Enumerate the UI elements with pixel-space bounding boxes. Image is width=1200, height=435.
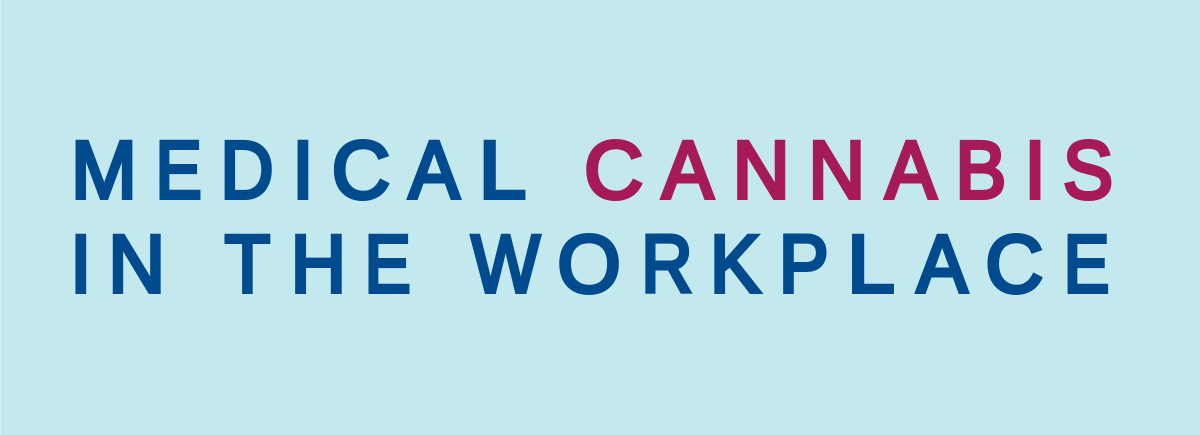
- title line 1: medical: I: [293, 124, 313, 216]
- title line 2: L: [847, 218, 895, 310]
- title line 1: medical: D: [220, 126, 273, 216]
- title line 1: cannabis: N: [808, 125, 865, 215]
- title line 2: K: [710, 218, 760, 310]
- title line 2: P: [779, 218, 829, 310]
- title line 1: medical: A: [409, 125, 460, 216]
- title line 2: A: [917, 219, 968, 310]
- title line 1: cannabis: B: [955, 125, 1006, 216]
- title line 1: medical: C: [332, 126, 390, 216]
- title line 2: O: [557, 219, 621, 310]
- title line 1: cannabis: A: [662, 124, 713, 215]
- title line 2: E: [365, 219, 411, 310]
- title line 2: T: [225, 218, 270, 310]
- title line 1: cannabis: [584, 124, 1113, 216]
- title line 1: cannabis: S: [1063, 124, 1113, 216]
- title line 1: cannabis: C: [584, 125, 643, 216]
- title line 1: medical: [71, 124, 526, 216]
- title line 1: medical: M: [71, 125, 137, 216]
- title line 2: I: [70, 218, 91, 310]
- title line 2: R: [641, 220, 693, 310]
- title line 2: C: [985, 219, 1043, 310]
- title line 2: H: [291, 218, 346, 310]
- title line 2: N: [108, 218, 165, 309]
- title line 2: [70, 218, 1109, 310]
- title line 2: E: [1064, 218, 1109, 309]
- title line 1: cannabis: A: [885, 125, 937, 216]
- title: [70, 124, 1113, 310]
- title line 1: cannabis: I: [1025, 124, 1045, 216]
- title line 2: W: [471, 219, 540, 310]
- title line 1: medical: E: [156, 125, 202, 216]
- title line 1: cannabis: N: [733, 125, 790, 216]
- title line 1: medical: L: [479, 124, 526, 216]
